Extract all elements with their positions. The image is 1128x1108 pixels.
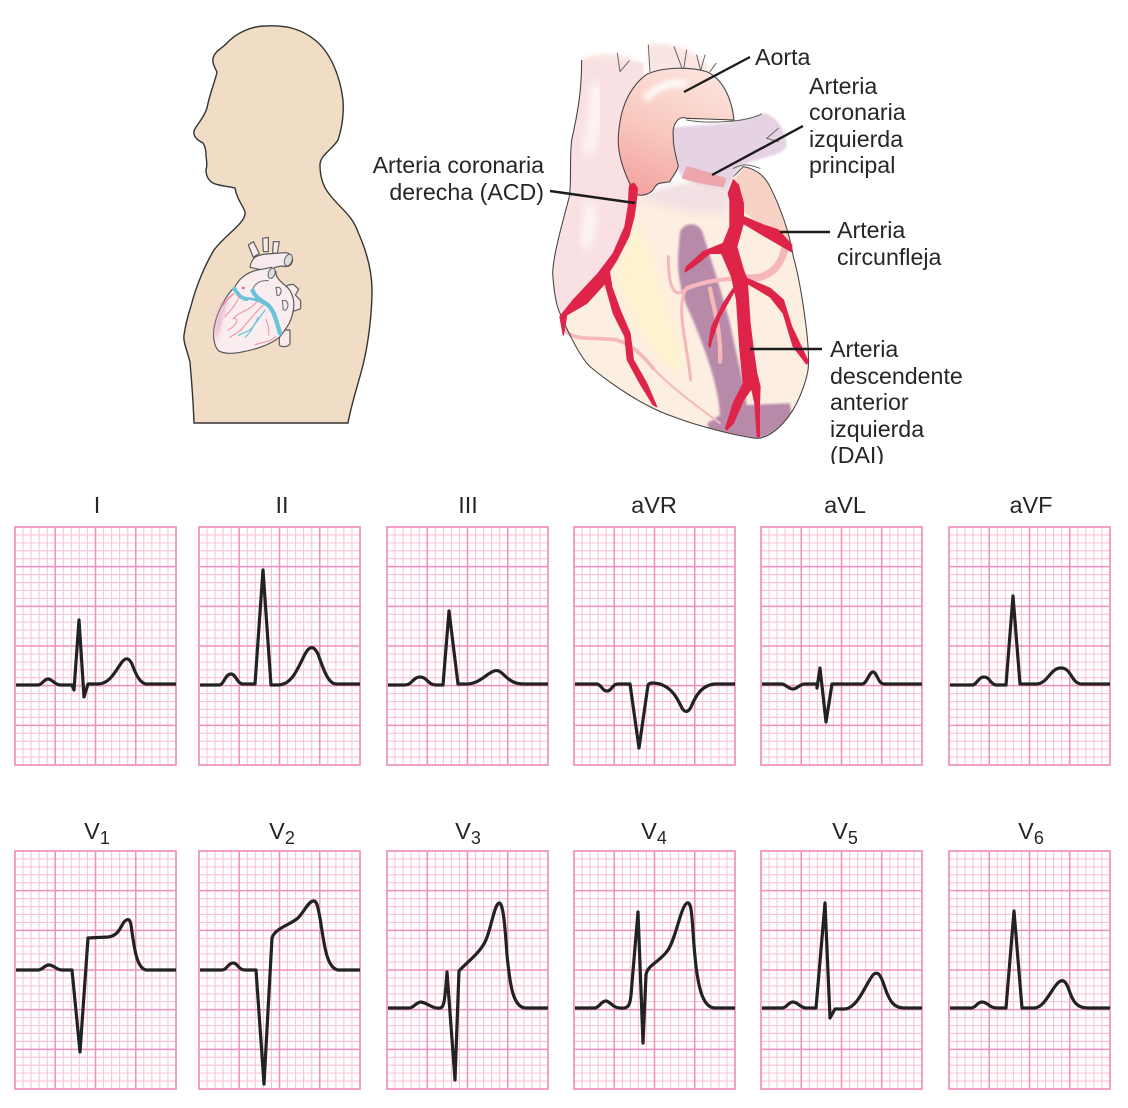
heading: V2: 2 [285,828,295,848]
ECG panel: II [199,527,360,765]
label: Arteria coronaria izquierda principal: izquierda [809,126,903,152]
label: Arteria descendente anterior izquierda (DAI): izquierda [830,416,924,442]
heading: V1: V [84,818,100,844]
ECG panel: V2 [199,851,360,1089]
heading: V6: V [1018,818,1034,844]
illustration: coronary heart anatomy [547,44,808,438]
label: Aorta: Aorta [755,44,811,70]
ECG panel: aVR [574,527,735,765]
heading: V5: V [832,818,848,844]
ECG panel: V5 [761,851,922,1089]
heading: V6: 6 [1034,828,1044,848]
trunk fade below aorta [640,184,730,214]
heading: V5: 5 [848,828,858,848]
ischemic purple territory [678,224,792,438]
valves [276,287,288,310]
label: Arteria coronaria izquierda principal: coronaria [809,99,906,125]
blue coronary veins [234,289,280,337]
right atrium highlights [583,83,596,247]
label: Arteria descendente anterior izquierda (DAI): descendente [830,363,963,389]
great vessels [248,237,279,257]
label: Arteria descendente anterior izquierda (DAI): (DAI) [830,442,884,468]
heading: V4: 4 [657,828,667,848]
heading: V4: V [641,818,657,844]
label: Arteria coronaria derecha (ACD): Arteria coronaria [373,152,544,178]
label: Arteria descendente anterior izquierda (DAI): anterior [830,389,909,415]
ECG panel: aVL [761,527,922,765]
label: Arteria coronaria izquierda principal: Arteria [809,73,877,99]
yellow glow [617,220,687,373]
label: Arteria circunfleja: Arteria [837,217,905,243]
right lobes [280,284,301,313]
label: Arteria coronaria derecha (ACD): derecha (ACD) [389,179,544,205]
left main band [682,166,727,187]
ECG panel: III [387,527,548,765]
lower lobe [279,330,290,347]
faint rear vessels [565,248,785,423]
pulmonary trunk [672,113,787,190]
heading: aVR: aVR [631,492,677,518]
heading: III: III [458,492,478,518]
heading: I: I [94,492,100,518]
vena cava and vessel tops [582,44,712,107]
heading: V3: 3 [471,828,481,848]
heart body [214,267,294,353]
label: Arteria circunfleja: circunfleja [837,244,941,270]
small heart [214,237,301,353]
ECG panel: aVF [949,527,1110,765]
heart outline [553,60,808,438]
heading: aVL: aVL [824,492,866,518]
ECG panel: V6 [949,851,1110,1089]
heading: V2: V [269,818,285,844]
heading: II: II [275,492,289,518]
label: Arteria coronaria izquierda principal: principal [809,152,895,178]
right atrium [547,57,643,315]
left ventricle upper [734,168,790,242]
left shade of heart [215,298,228,340]
aortic mouths [283,253,294,267]
silhouette: torso and head in profile [184,26,372,423]
aorta [618,68,734,195]
ECG panel: I [15,527,176,765]
heading: aVF: aVF [1009,492,1053,518]
heading: V3: V [455,818,471,844]
leader lines [550,57,830,349]
artery: right coronary [560,183,657,407]
ECG panel: V4 [574,851,735,1089]
heart regions [547,57,793,438]
red coronary vessels [223,287,276,345]
aorta highlight [645,83,687,100]
pulmonary trunk edge [687,114,778,168]
heading: V1: 1 [100,828,110,848]
heart body [553,60,808,438]
ECG panel: V1 [15,851,176,1089]
ECG panel: V3 [387,851,548,1089]
illustration: human silhouette with heart [184,26,372,423]
top vessel details [617,45,716,72]
label: Arteria descendente anterior izquierda (DAI): Arteria [830,336,898,362]
artery: left coronary and branches [685,180,808,437]
